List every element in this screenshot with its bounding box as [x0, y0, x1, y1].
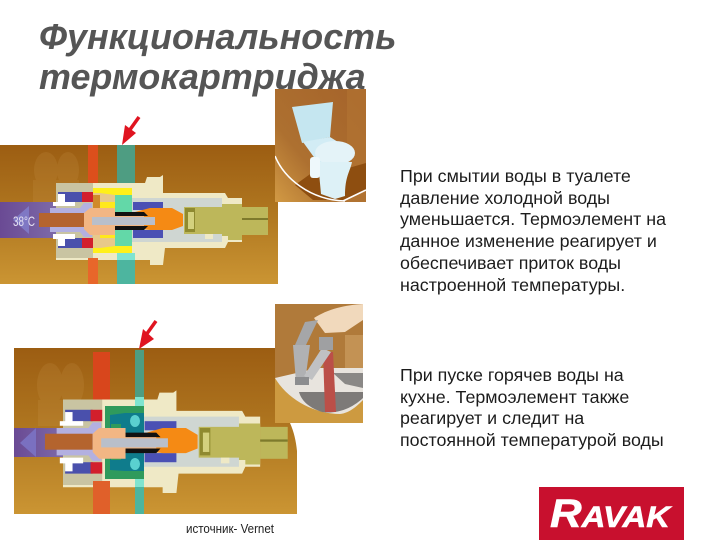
thermo-element core	[39, 208, 155, 235]
panel background	[14, 348, 297, 514]
temperature label: 38°C	[13, 213, 35, 229]
icon: red arrow bottom	[139, 321, 156, 349]
mixing chamber: teal and green	[105, 406, 144, 479]
outlet channels below body	[117, 253, 135, 260]
text block: toilet flush: При смытии воды в туалете	[400, 166, 631, 186]
text block: toilet flush	[400, 166, 666, 295]
outlet flow band	[0, 202, 56, 238]
cold water channel	[117, 145, 135, 284]
text block: kitchen hot water: постоянной температурой воды	[400, 430, 664, 450]
source caption: источник- Vernet	[186, 522, 274, 536]
icon: red arrow top	[122, 117, 139, 145]
faint background figures	[33, 152, 79, 202]
logo: RAVAK: RAVAK	[550, 492, 673, 536]
text block: toilet flush: настроенной температуры.	[400, 275, 625, 295]
image: toilet	[275, 89, 366, 202]
outlet flow arrow	[13, 206, 29, 234]
cartridge body	[50, 175, 268, 265]
title	[39, 17, 396, 97]
thermo-element core	[45, 428, 168, 459]
outlet channels below body	[135, 397, 144, 406]
title: термокартриджа	[39, 57, 366, 97]
faint background figures	[37, 363, 84, 426]
text block: toilet flush: данное изменение реагирует и	[400, 231, 657, 251]
text block: toilet flush: уменьшается. Термоэлемент на	[400, 209, 666, 229]
logo: RAVAK	[539, 487, 684, 540]
hot water channel	[88, 145, 98, 284]
panel: bottom cartridge cross-section	[14, 348, 297, 514]
mixing chamber: yellow and green	[93, 188, 132, 253]
text block: kitchen hot water: кухне. Термоэлемент также	[400, 387, 629, 407]
text block: toilet flush: давление холодной воды	[400, 188, 610, 208]
cartridge body	[57, 390, 288, 493]
text block: kitchen hot water: При пуске горячев воды на	[400, 365, 624, 385]
image: faucet	[275, 304, 363, 423]
panel background	[0, 145, 278, 284]
cold water channel	[135, 350, 144, 514]
white arc at panel edge	[290, 423, 297, 451]
text block: toilet flush: обеспечивает приток воды	[400, 253, 621, 273]
text block: kitchen hot water	[400, 365, 664, 450]
text block: kitchen hot water: реагирует и следит на	[400, 408, 584, 428]
panel: top cartridge cross-section	[0, 145, 278, 284]
outlet flow band	[14, 428, 64, 457]
hot water channel	[93, 352, 110, 514]
title: Функциональность	[39, 17, 396, 57]
outlet flow arrow	[20, 428, 36, 457]
